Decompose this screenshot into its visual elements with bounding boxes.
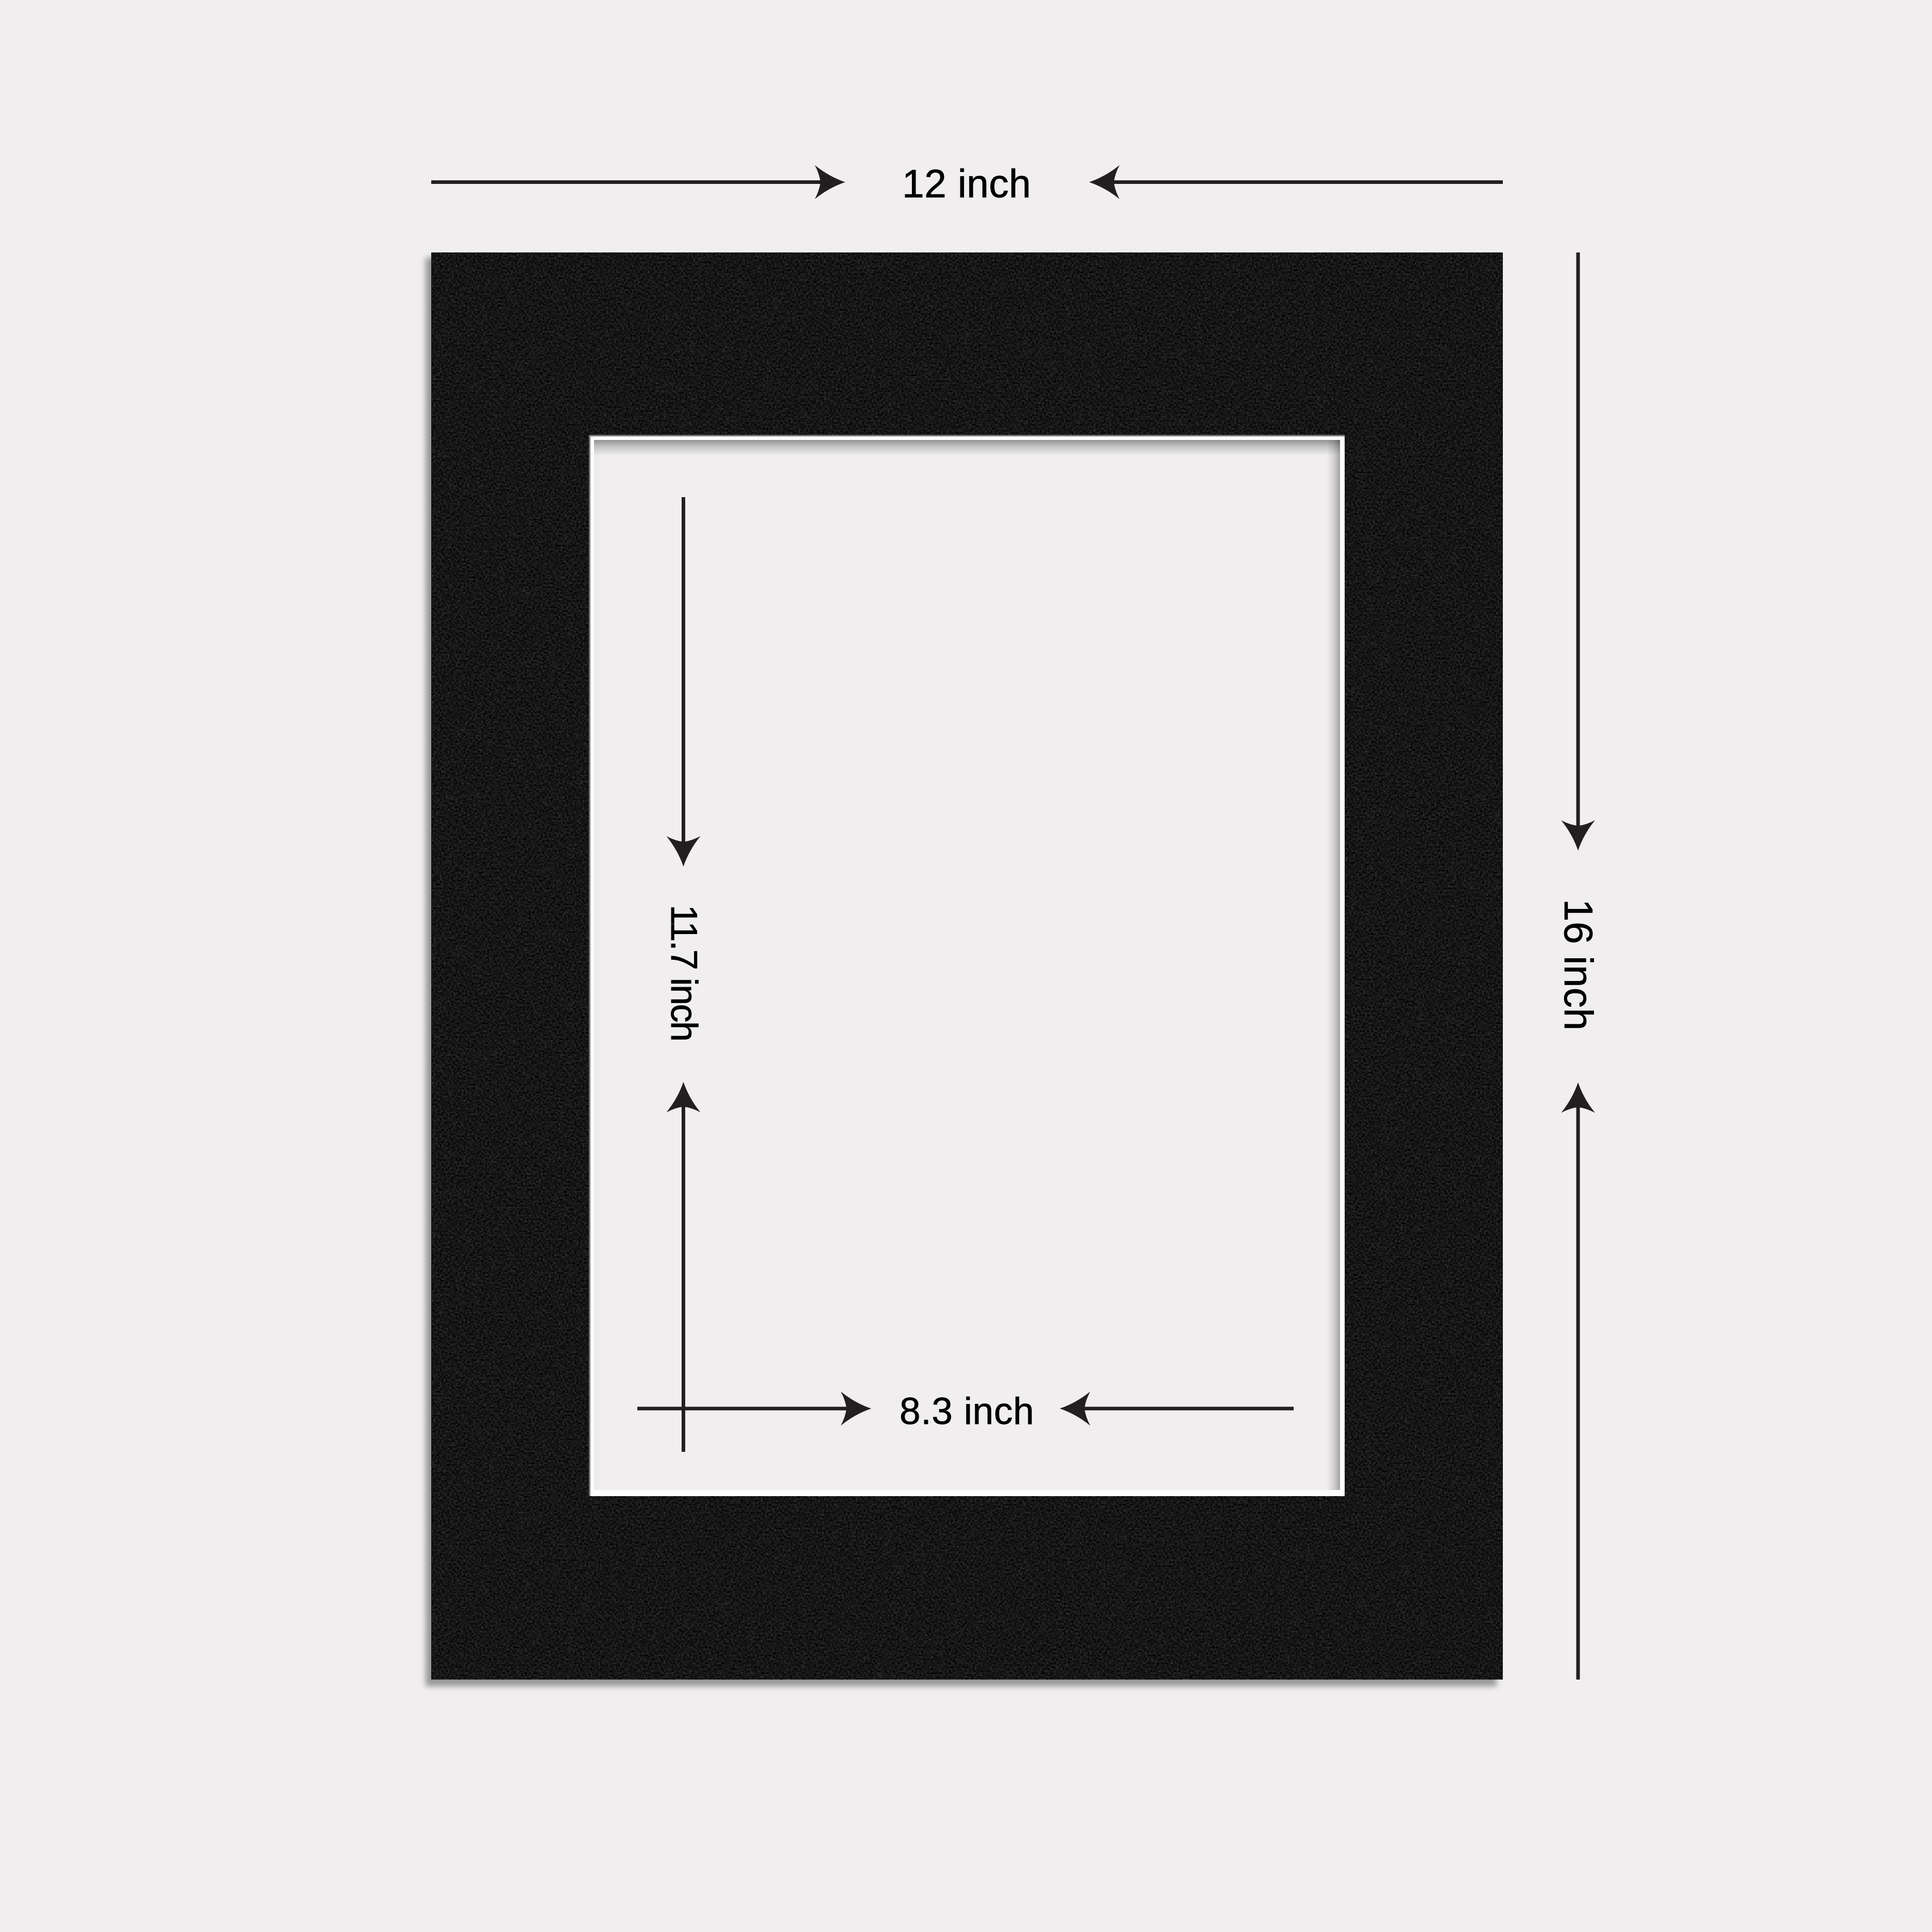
panel: mat opening	[589, 435, 1345, 1496]
label: 11.7 inch: 11.7 inch	[663, 905, 704, 1042]
label: 16 inch: 16 inch	[1556, 899, 1601, 1030]
panel: black mat board	[426, 252, 1503, 1686]
mat surface	[431, 252, 1503, 1680]
arrow: inner height bottom	[667, 1082, 701, 1452]
opening cut edge	[589, 435, 1345, 1496]
inner shadow left	[594, 440, 602, 1490]
arrow: outer height top	[1561, 252, 1595, 851]
opening interior	[594, 440, 1340, 1490]
arrow: inner height top	[667, 497, 701, 867]
mat drop shadow	[426, 258, 1497, 1686]
label: 12 inch: 12 inch	[902, 162, 1031, 206]
arrow: top width left	[431, 165, 845, 199]
inner shadow right	[1327, 440, 1340, 1490]
inner shadow top	[594, 440, 1340, 455]
label: 8.3 inch: 8.3 inch	[900, 1391, 1034, 1432]
arrow: outer height bottom	[1561, 1082, 1595, 1680]
mat texture	[431, 252, 1503, 1680]
arrow: inner width left	[637, 1392, 871, 1426]
opening white bevel	[590, 436, 1345, 1496]
arrow: top width right	[1089, 165, 1503, 199]
arrow: inner width right	[1060, 1392, 1294, 1426]
